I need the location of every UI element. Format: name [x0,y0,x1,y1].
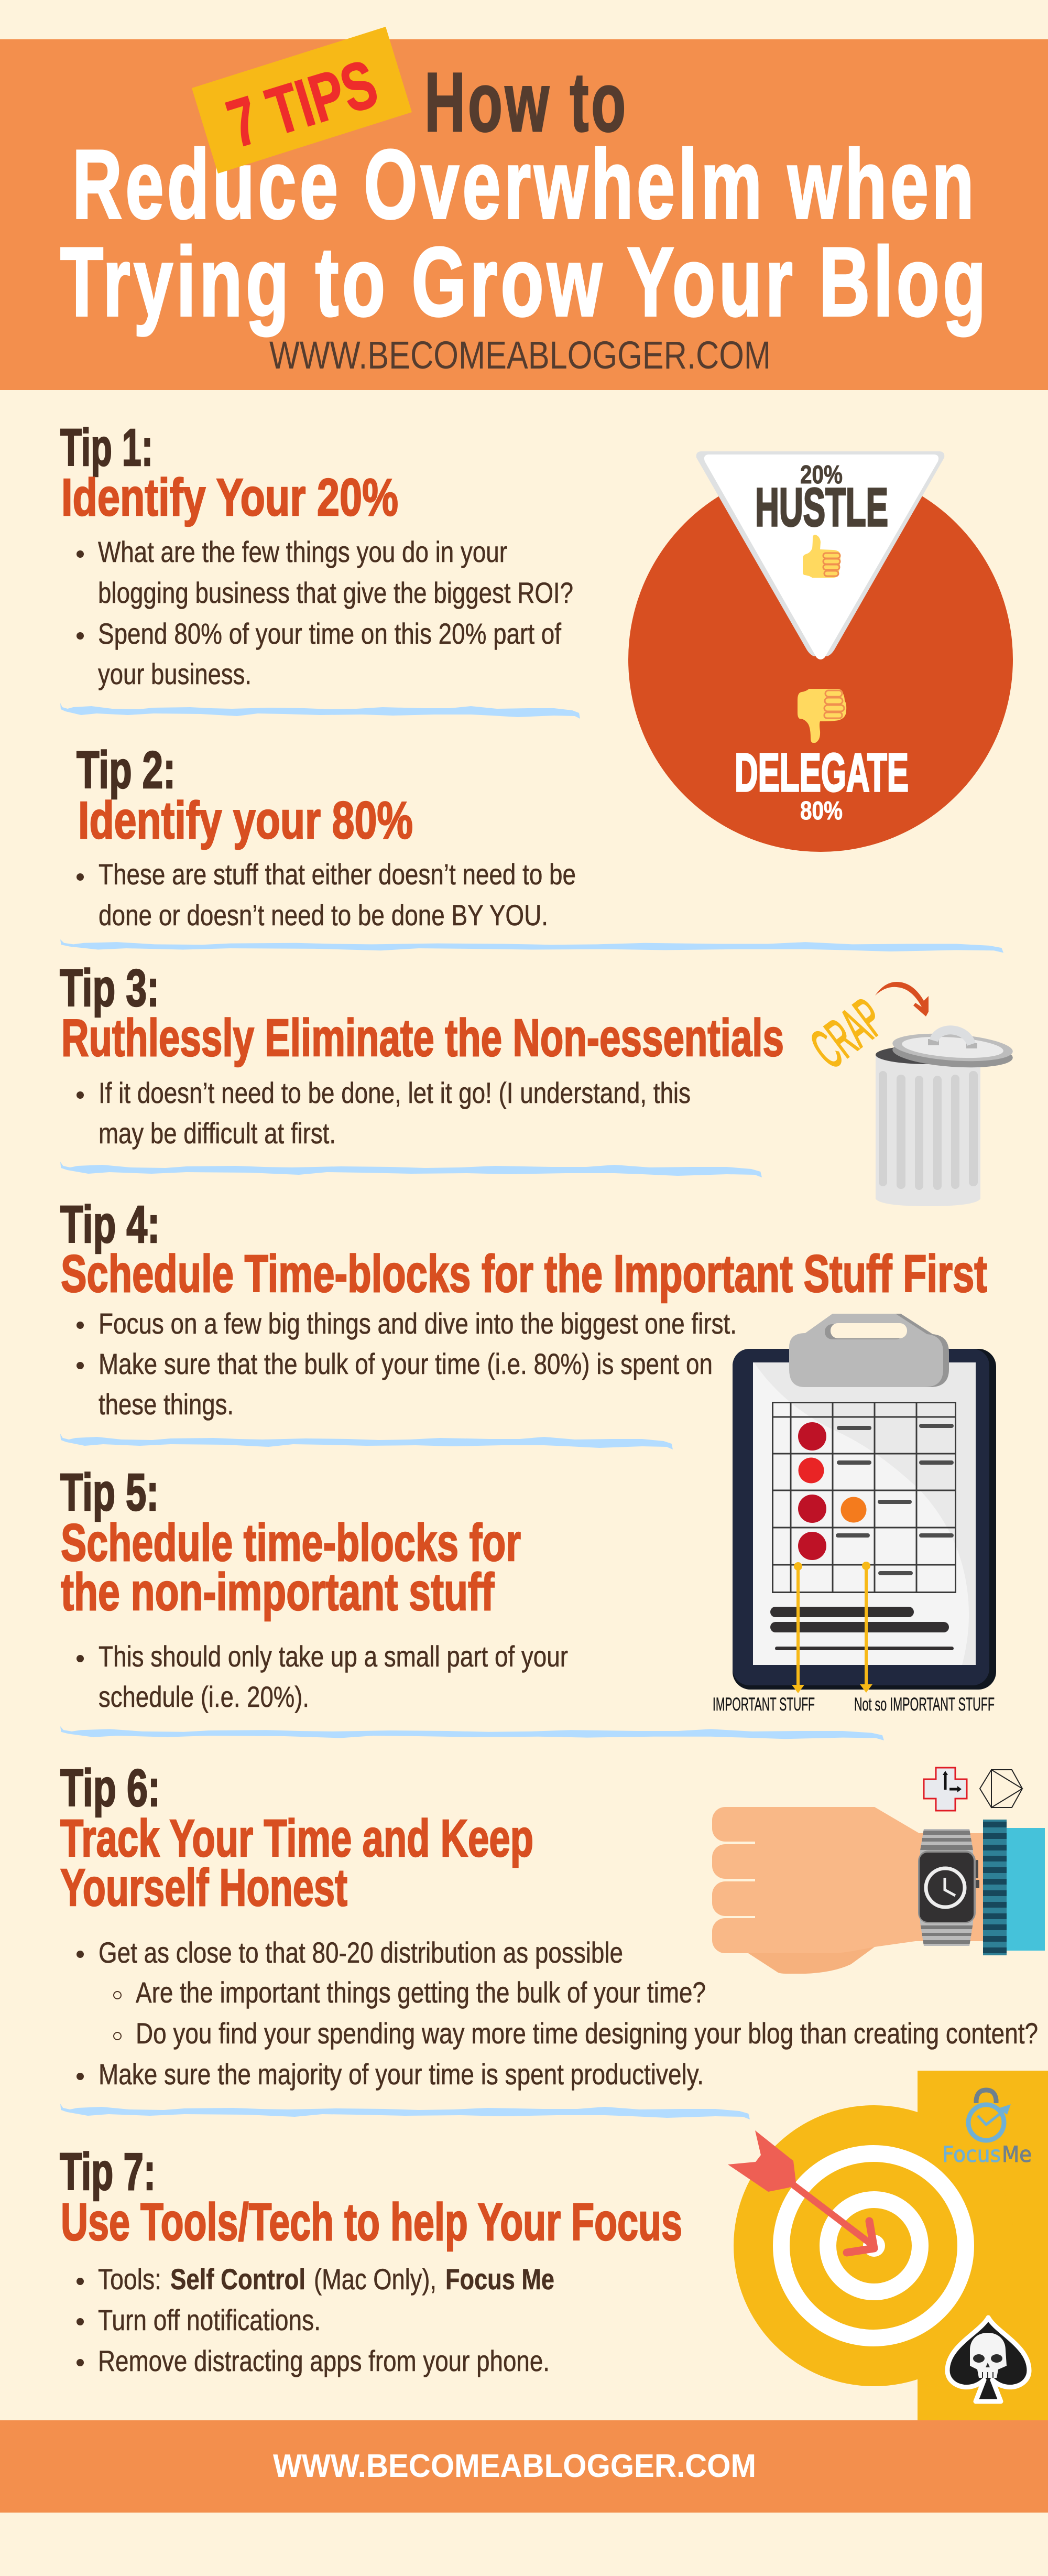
icon: ace of spades skull [947,2318,1029,2401]
trash can body [876,1045,980,1206]
tip 4 bullets: these things. [99,1388,234,1421]
tip 7 bullets: Focus Me [445,2263,554,2296]
website url: WWW.BECOMEABLOGGER.COM [269,333,771,377]
tip 7 bullets [77,2263,554,2377]
tip 2 label: Tip 2: [77,741,176,799]
icon: thumbs down [798,689,846,743]
tip 7 bullets: (Mac Only), [314,2263,436,2296]
20% label: 20% [800,461,843,489]
arrow in target [728,2130,874,2253]
panel: tip 6 [60,1759,1038,2091]
illustration: target and tools [728,2071,1048,2420]
tip 5 heading line 1: Schedule time-blocks for [61,1513,521,1572]
tip 6 bullets: Are the important things getting the bulk of your time? [136,1976,706,2009]
shirt cuff [983,1820,1045,1955]
tip 3 label: Tip 3: [60,959,159,1018]
tip 5 heading line 2: the non-important stuff [61,1563,495,1621]
tip 5 bullets: This should only take up a small part of your [99,1640,568,1673]
tip 1 bullets: What are the few things you do in your [98,535,507,568]
target [734,2105,1014,2386]
tip 6 bullets: Get as close to that 80-20 distribution as possible [99,1936,623,1969]
tip 6 bullets [77,1936,1038,2091]
tip 2 bullets: These are stuff that either doesn’t need to be [99,858,576,891]
tip 2 heading: Identify your 80% [78,791,413,850]
icon: self control clock cross [924,1768,967,1811]
tip 5 bullets [77,1640,568,1713]
tip 3 heading: Ruthlessly Eliminate the Non-essentials [61,1009,784,1067]
tip 7 bullets: Turn off notifications. [98,2303,321,2336]
tip 3 bullets: If it doesn’t need to be done, let it go! (I understand, this [99,1076,691,1109]
7 tips sticker: 7 TIPS [219,46,386,162]
hand [712,1807,984,1974]
tip 1 bullets [77,535,573,690]
icon: hexagon logo [980,1770,1022,1807]
arrow: important stuff [792,1562,804,1693]
tip 7 bullets: Tools: [98,2263,161,2296]
title: How to: How to [424,55,628,149]
tip 7 heading: Use Tools/Tech to help Your Focus [61,2193,682,2252]
focusme logo: Me [1002,2141,1032,2167]
text bars on clipboard [770,1607,954,1650]
pie chart: 20% hustle vs 80% delegate [628,451,1013,852]
panel: tip 1 [60,418,573,690]
tip 5 label: Tip 5: [60,1463,159,1522]
label: important stuff: IMPORTANT STUFF [713,1694,815,1715]
clipboard clip [789,1314,949,1387]
tip 3 bullets: may be difficult at first. [99,1117,336,1150]
schedule dashes [836,1424,954,1575]
clipboard board [733,1349,996,1690]
tip 7 bullets: Self Control [170,2263,305,2296]
panel: tip 7 [60,2142,682,2377]
tip 2 bullets [77,858,576,932]
tip 1 heading: Identify Your 20% [61,468,398,527]
watch band [920,1829,973,1946]
footer banner [0,2420,1048,2513]
tip 7 label: Tip 7: [60,2142,156,2201]
tip 6 bullets: Make sure the majority of your time is spent productively. [99,2058,704,2091]
tip 4 bullets: Focus on a few big things and dive into the biggest one first. [99,1307,737,1340]
illustration: hand with watch [712,1768,1045,1974]
panel: tip 5 [60,1463,568,1713]
yellow tools panel [918,2071,1048,2420]
footer url: WWW.BECOMEABLOGGER.COM [273,2448,756,2484]
focusme logo: Focus [942,2141,1001,2167]
watch face [918,1850,979,1923]
panel: tip 3 [60,959,784,1150]
tip 1 bullets: your business. [98,657,252,690]
hustle label: HUSTLE [755,477,888,537]
tip 4 label: Tip 4: [60,1195,160,1254]
panel: tip 4 [60,1195,987,1421]
focusme logo [942,2090,1032,2167]
panel: tip 2 [77,741,576,932]
tip 6 label: Tip 6: [60,1759,160,1817]
crap text: CRAP [800,986,895,1080]
arrow into trash [875,982,929,1016]
header banner [0,27,1048,390]
tip 5 bullets: schedule (i.e. 20%). [99,1680,309,1713]
tip 4 bullets [77,1307,737,1421]
trash can lid [892,1030,1013,1071]
arrow: not so important stuff [860,1562,872,1693]
tip 6 heading line 1: Track Your Time and Keep [60,1809,533,1868]
80% label: 80% [800,797,843,825]
schedule dots [798,1422,867,1560]
tip 2 bullets: done or doesn’t need to be done BY YOU. [99,899,548,932]
tip 1 bullets: blogging business that give the biggest ROI? [98,576,573,609]
schedule grid [772,1402,956,1593]
icon: thumbs up [803,535,840,578]
tip 3 bullets [77,1076,691,1150]
tip 4 bullets: Make sure that the bulk of your time (i.e. 80%) is spent on [99,1347,713,1380]
delegate label: DELEGATE [735,742,909,803]
tip 1 bullets: Spend 80% of your time on this 20% part of [98,617,561,650]
tip 1 label: Tip 1: [60,418,153,477]
tip 7 bullets: Remove distracting apps from your phone. [98,2344,550,2377]
tip 6 heading line 2: Yourself Honest [60,1858,347,1917]
illustration: clipboard schedule [713,1314,996,1715]
illustration: trash can with crap label [800,982,1013,1206]
